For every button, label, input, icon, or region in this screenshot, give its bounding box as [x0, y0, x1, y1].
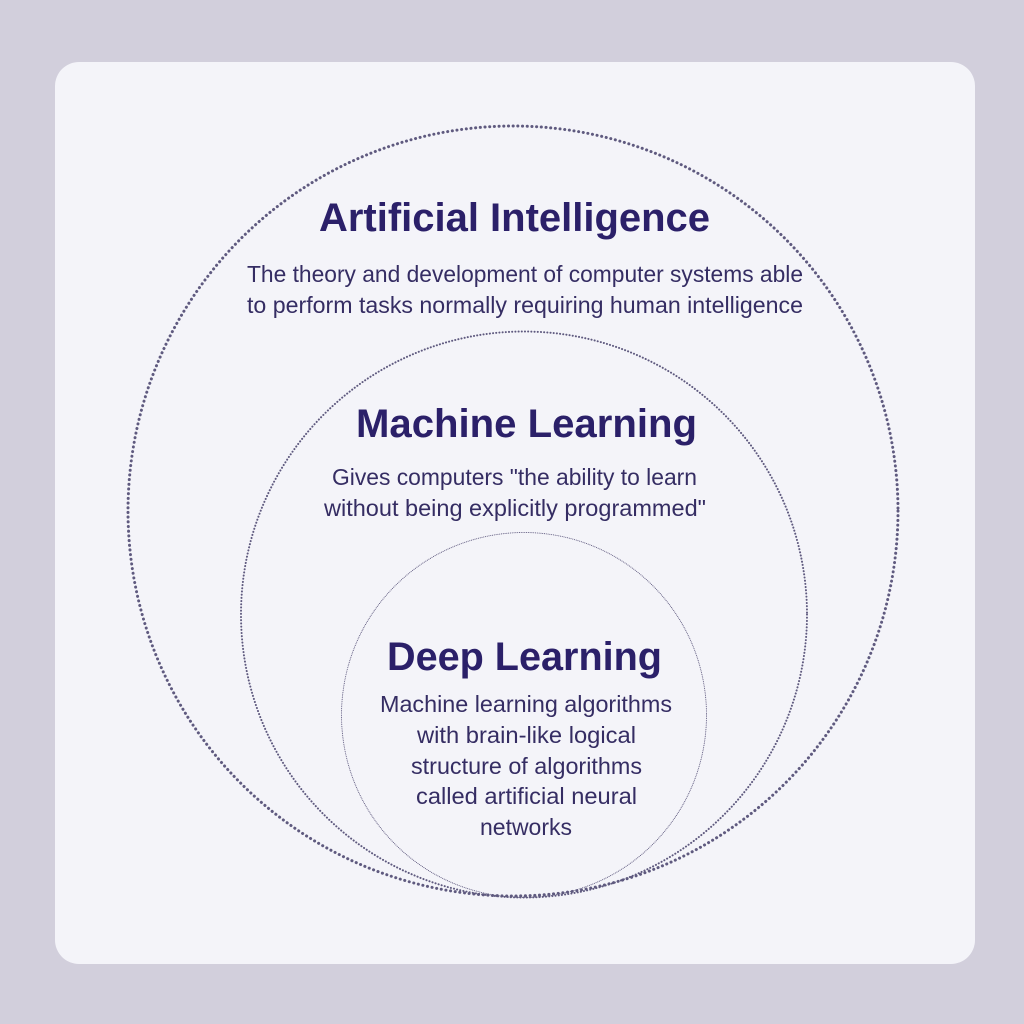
text block: Deep Learning description: structure of algorithms: [411, 753, 642, 779]
text block: Deep Learning description: called artificial neural: [416, 783, 637, 809]
circle: Deep Learning boundary: [342, 532, 706, 898]
circle: Artificial Intelligence boundary: [128, 126, 898, 896]
text block: Deep Learning description: Machine learning algorithms: [380, 691, 672, 717]
heading: Machine Learning: Machine Learning: [356, 402, 697, 446]
text block: Artificial Intelligence description: to perform tasks normally requiring human intelligence: [247, 292, 803, 318]
text block: Deep Learning description: networks: [480, 814, 572, 840]
text block: Machine Learning description: without being explicitly programmed": [323, 495, 706, 521]
text block: Artificial Intelligence description: [247, 261, 803, 318]
heading: Artificial Intelligence: Artificial Intelligence: [319, 196, 710, 240]
text block: Machine Learning description: Gives computers "the ability to learn: [332, 464, 697, 490]
circle: Machine Learning boundary: [241, 332, 807, 898]
text block: Deep Learning description: with brain-like logical: [416, 722, 636, 748]
text block: Machine Learning description: [323, 464, 706, 521]
text block: Artificial Intelligence description: The theory and development of computer systems able: [247, 261, 803, 287]
panel: background card: [55, 62, 975, 964]
text block: Deep Learning description: [380, 691, 672, 840]
heading: Deep Learning: Deep Learning: [387, 635, 662, 679]
